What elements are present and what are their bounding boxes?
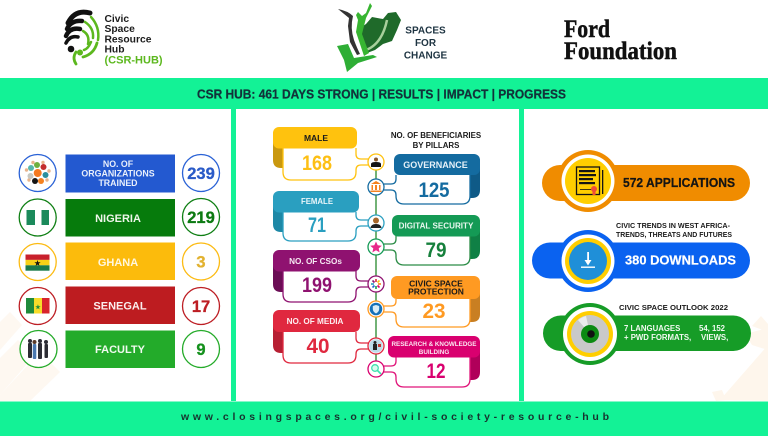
card: media: 40 [306,335,330,358]
timeline spine [375,162,377,369]
heading: beneficiaries by pillars: BY PILLARS [413,141,459,150]
card: civic space protection: CIVIC SPACE [409,278,463,288]
stats: 54, 152 [699,324,726,333]
card: research and knowledge building: BUILDING [419,349,449,356]
card: governance: GOVERNANCE [403,160,468,170]
card: female [273,191,369,241]
row: Senegal: 17 [192,298,210,316]
card: male: 168 [302,152,332,175]
stats: + PWD FORMATS, [624,333,691,342]
icon: eye [571,315,609,353]
label bar [66,199,175,236]
row: Ghana [19,242,220,280]
card: governance [384,154,480,204]
wordmark [404,26,447,62]
card: research and knowledge building [384,336,480,387]
caption: civic space outlook: CIVIC SPACE OUTLOOK 2022 [619,303,728,312]
icon: certificate document [576,167,603,195]
card: civic space protection: 23 [422,300,446,323]
node: shield icon [368,301,384,317]
pill: languages and views [543,303,751,365]
card: media [273,310,369,363]
icon: Senegal flag [19,288,56,324]
title banner [0,78,768,109]
card: female: FEMALE [301,197,333,206]
label bar [66,154,175,192]
caption: civic trends: CIVIC TRENDS IN WEST AFRICA- [616,222,731,230]
row: faculty: 9 [196,341,206,359]
panel: beneficiaries timeline [273,127,481,387]
value [182,243,220,280]
icon: faculty people [20,330,57,368]
icon: Ghana flag [19,244,56,280]
icon: CSR hub striped leaf [66,12,98,64]
node: media reporter icon [368,338,384,354]
row: faculty: FACULTY [95,344,146,356]
icon: Nigeria flag [19,199,56,236]
title: CSR HUB: 461 DAYS STRONG | RESULTS | IMPACT | PROGRESS [197,86,566,102]
wordmark: (CSR-HUB) [104,54,163,66]
wordmark: Civic [104,14,129,25]
node: star icon [368,239,384,255]
value: 380 DOWNLOADS [625,254,736,268]
row: organizations trained: NO. OF [103,159,134,169]
row: organizations trained: ORGANIZATIONS [81,168,155,178]
caption: civic trends: TRENDS, THREATS AND FUTURES [616,231,732,239]
wordmark: SPACES [405,26,446,36]
node: judge icon [368,154,384,170]
value [182,198,220,236]
icon: Senegal flag: ★ [35,304,41,311]
label bar [66,242,175,280]
pill: 572 applications [542,150,750,212]
row: Senegal [19,286,220,324]
card: civic space protection [384,276,480,327]
card: female: 71 [308,214,326,237]
wordmark: Hub [104,44,125,56]
stats: 7 LANGUAGES [624,324,680,333]
logo: Ford Foundation: Foundation [564,38,677,65]
value [182,154,220,192]
row: organizations trained: TRAINED [98,178,138,188]
footer banner [0,402,768,436]
logo: Ford Foundation [564,16,677,65]
label bar [66,330,175,368]
node: woman icon [368,215,384,231]
card: male [273,127,369,180]
background pattern: right triangles [712,316,768,401]
logo: Ford Foundation: Ford [564,16,610,43]
pill: 380 downloads [532,230,750,292]
card: digital security: DIGITAL SECURITY [399,222,474,230]
card: CSOs: NO. OF CSOs [289,257,342,266]
row: Nigeria: NIGERIA [95,213,141,225]
value [182,288,220,324]
row: Ghana: GHANA [98,257,138,269]
wordmark: Space [104,24,135,35]
stats: VIEWS, [701,333,728,342]
card: media: NO. OF MEDIA [287,317,344,326]
card: research and knowledge building: 12 [426,360,446,383]
node: community wheel icon [368,276,384,292]
icon: Nigeria map with figure [337,3,401,72]
card: research and knowledge building: RESEARCH & KNOWLEDGE [391,341,477,348]
row: organizations trained [19,154,220,192]
heading: beneficiaries by pillars: NO. OF BENEFICIARIES [391,131,481,140]
row: organizations trained: 239 [187,165,215,183]
row: Ghana: 3 [196,253,206,271]
row: Nigeria [19,198,220,236]
card: digital security: 79 [426,239,446,262]
card: governance: 125 [418,179,450,202]
card: male: MALE [304,133,328,143]
wordmark: Resource [104,34,152,46]
logo: Civic Space Resource Hub [66,12,163,66]
card: digital security [384,215,480,265]
value: 572 APPLICATIONS [623,176,735,190]
icon: download arrow [581,252,595,268]
card: CSOs: 199 [302,274,332,297]
caption: civic trends [616,222,732,239]
node: institution icon [368,179,384,195]
wordmark [104,14,163,66]
stats [624,324,728,342]
panel: organizations trained [19,154,220,368]
node: magnifier icon [368,361,384,377]
value [182,330,220,368]
background pattern: left triangles [0,312,60,401]
row: Nigeria: 219 [187,209,215,227]
website URL: www.closingspaces.org/civil-society-resource-hub [180,411,609,423]
card: civic space protection: PROTECTION [408,286,464,296]
heading: beneficiaries by pillars [391,131,481,150]
row: Senegal: SENEGAL [93,300,147,312]
card: CSOs [273,250,369,302]
logo: Spaces for Change [337,3,447,72]
panel: publications [532,150,751,365]
panel dividers [231,109,524,401]
icon: Ghana flag: ★ [34,260,41,268]
row: faculty [20,330,220,368]
wordmark: FOR [415,38,437,49]
wordmark: CHANGE [404,50,447,62]
label bar [66,286,175,324]
icon: group circle [19,154,56,192]
